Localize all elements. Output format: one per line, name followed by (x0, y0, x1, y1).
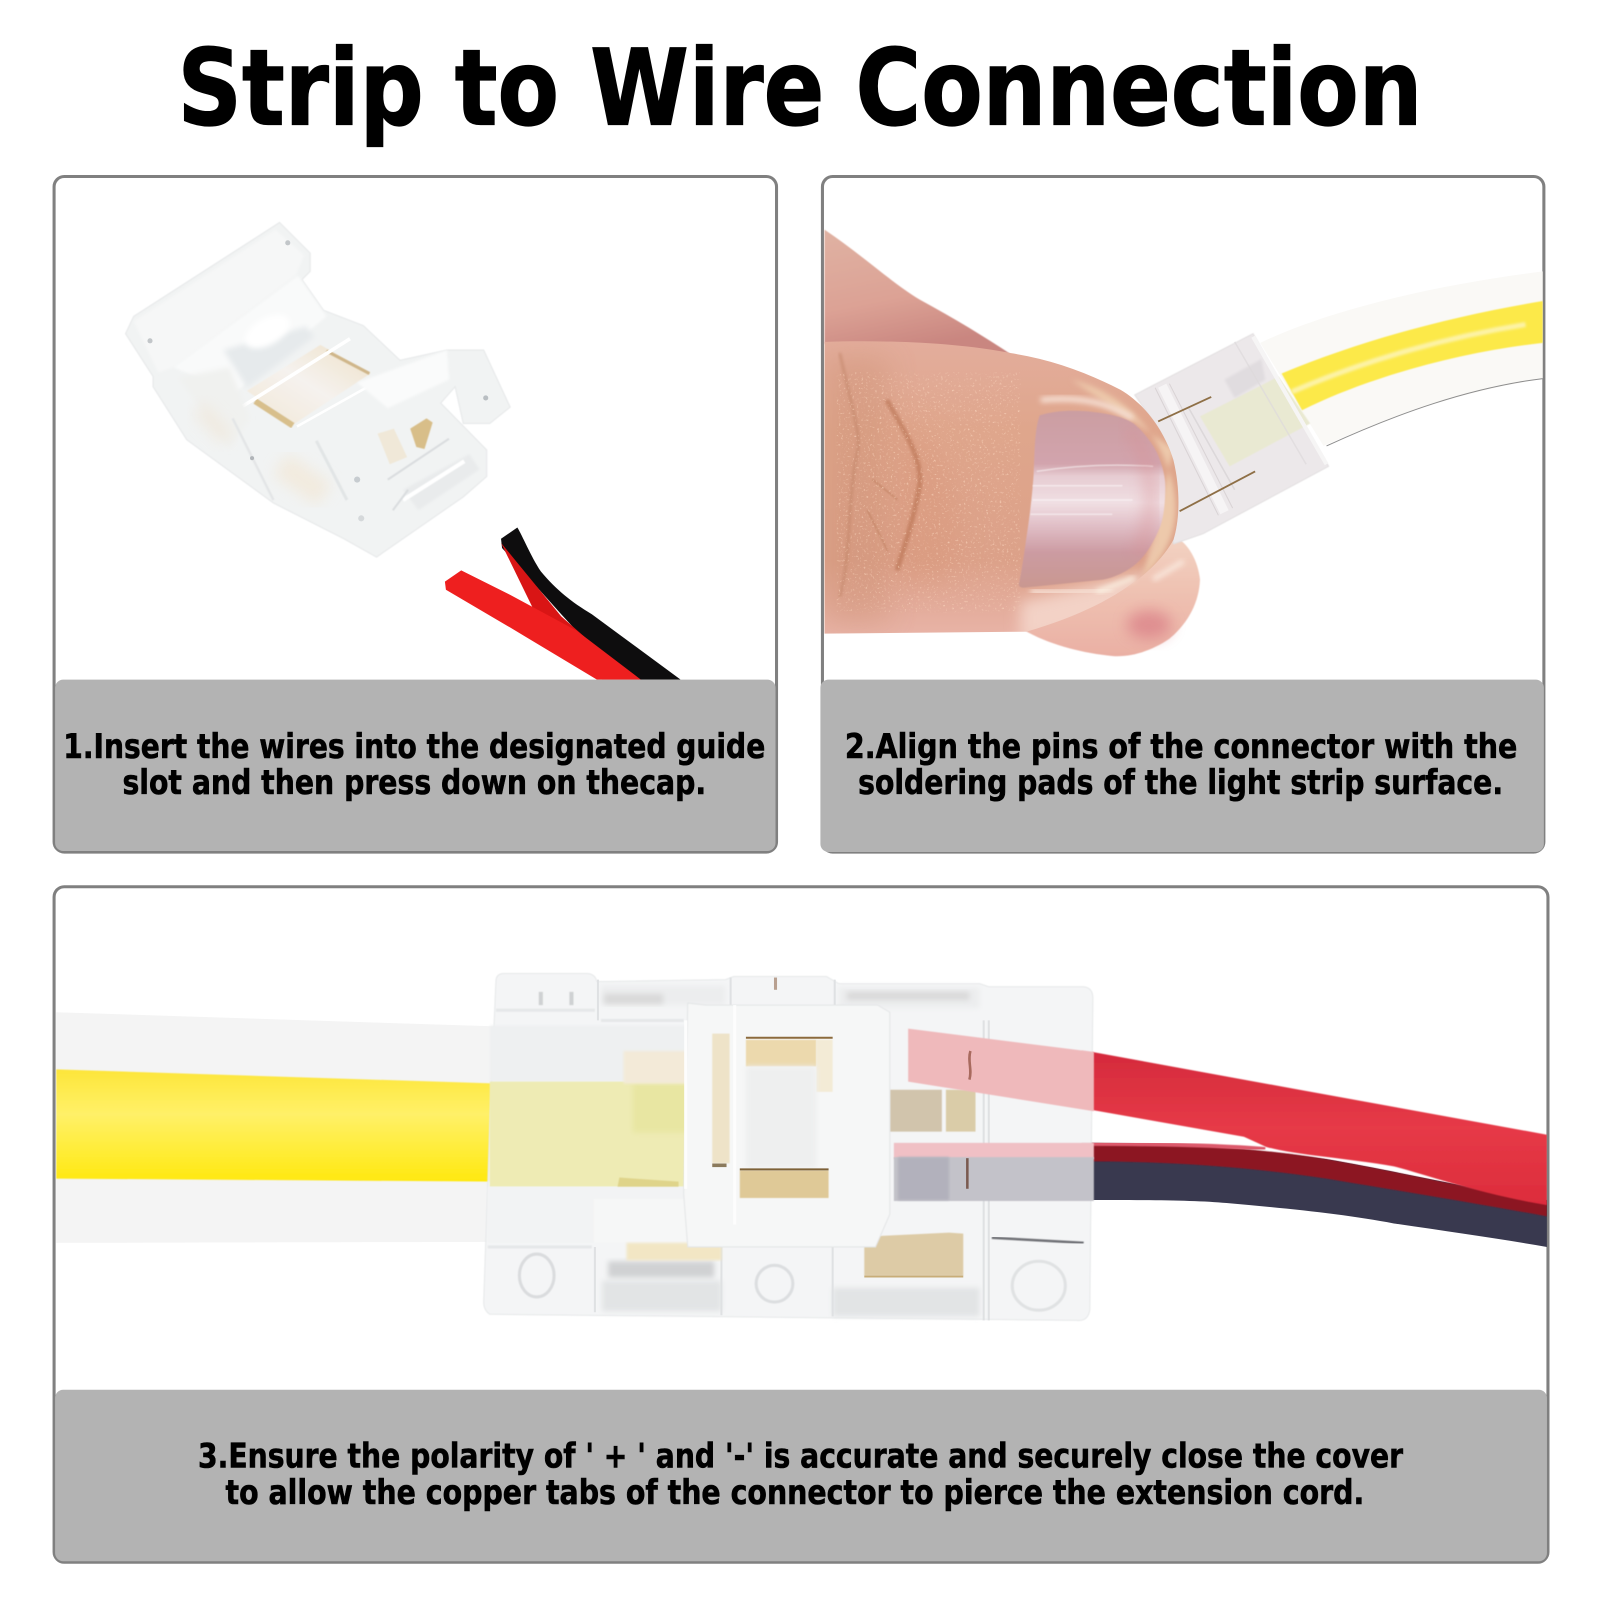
caption text (198, 1436, 1403, 1512)
panel frame (822, 177, 1544, 852)
COB strip (56, 1012, 500, 1243)
COB strip (1260, 271, 1543, 446)
wires seen through cover (908, 1029, 1094, 1111)
panel frame (54, 177, 777, 852)
gold contacts (890, 1090, 942, 1132)
caption text: slot and then press down on thecap. (122, 763, 706, 802)
illustration: stripped black wire (501, 528, 681, 680)
caption text: to allow the copper tabs of the connector to pierce the extension cord. (226, 1473, 1364, 1512)
caption text (845, 727, 1517, 802)
red wire (1082, 1050, 1547, 1205)
panel frame (54, 887, 1548, 1562)
connector on strip (1135, 334, 1329, 544)
caption text: 1.Insert the wires into the designated guide (63, 727, 765, 766)
lower finger (1020, 536, 1200, 656)
panel: step 2 (820, 177, 1544, 852)
title: Strip to Wire Connection (178, 26, 1422, 149)
panel: step 1 (54, 177, 777, 852)
strip and yellow seen through cover (491, 1026, 492, 1027)
center cap (684, 1003, 890, 1247)
photo: strip joined to wires by closed connector (56, 973, 1547, 1320)
illustration: red wire (445, 543, 641, 680)
caption text (63, 727, 765, 802)
nail (1019, 411, 1165, 588)
lobe details (601, 986, 980, 1008)
caption bar (820, 680, 1544, 852)
caption bar (55, 680, 776, 851)
illustration: open clear connector (126, 222, 510, 557)
panel: step 3 (54, 887, 1548, 1562)
photo: LED strip with connector held in fingers (824, 230, 1543, 656)
caption bar (55, 1390, 1547, 1561)
thumb (824, 230, 1178, 643)
clear connector (484, 973, 1094, 1320)
caption text: 3.Ensure the polarity of ' + ' and '-' is accurate and securely close the cover (198, 1436, 1403, 1475)
black wire (1082, 1143, 1547, 1247)
